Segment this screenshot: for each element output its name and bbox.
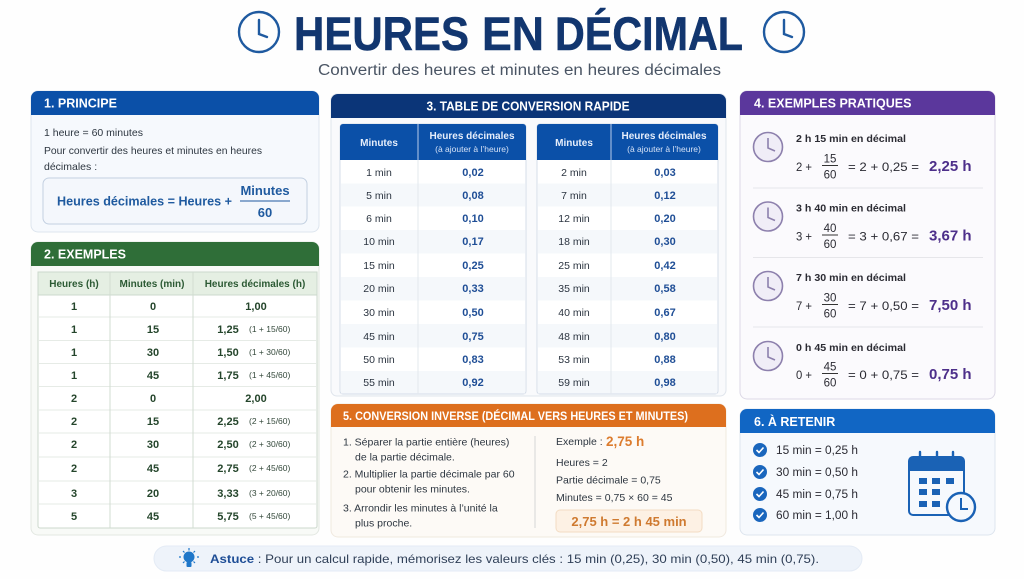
table: exemples: (2 + 45/60) <box>249 463 291 473</box>
table: right conversion: 0,20 <box>654 213 676 225</box>
table: right conversion: 0,67 <box>654 307 676 319</box>
table: exemples: 2,00 <box>245 393 267 405</box>
text block: Pour convertir des heures et minutes en heures <box>44 145 262 157</box>
table: exemples: Heures décimales (h) <box>205 279 305 290</box>
panel: 6. à retenir <box>740 409 995 535</box>
table: exemples: (2 + 30/60) <box>249 439 291 449</box>
table: right conversion: 7 min <box>561 190 587 202</box>
example: 7 h 30: 30 <box>824 292 836 304</box>
steps list: de la partie décimale. <box>355 452 455 464</box>
callout: result <box>556 510 702 532</box>
table: left conversion: 0,92 <box>462 377 484 389</box>
table: right conversion: Minutes <box>555 138 593 149</box>
table: right conversion: 2 min <box>561 167 587 179</box>
example: 2 h 15: 15 <box>824 154 836 166</box>
title: EN <box>482 7 544 60</box>
table: exemples: 2,25 <box>217 416 239 428</box>
worked example: 2,75 h <box>606 434 644 449</box>
table: right conversion: 25 min <box>558 260 590 272</box>
table: right conversion: 0,12 <box>654 190 676 202</box>
worked example: Partie décimale = 0,75 <box>556 474 661 486</box>
panel: 4. exemples pratiques <box>740 91 995 399</box>
worked example <box>556 434 702 532</box>
table: right conversion: 0,80 <box>654 331 676 343</box>
table: exemples: 2,50 <box>217 439 239 451</box>
example: 0 h 45: 45 <box>824 362 836 374</box>
table: exemples: 15 <box>147 416 159 428</box>
table: exemples: 45 <box>147 370 159 382</box>
heading: 1. PRINCIPE <box>44 96 117 110</box>
table: left conversion: 10 min <box>363 236 395 248</box>
example: 0 h 45 <box>754 342 972 390</box>
table: right conversion: 35 min <box>558 283 590 295</box>
example: 2 h 15: 2 + <box>796 160 812 174</box>
table: right conversion: 0,30 <box>654 236 676 248</box>
heading: 3. TABLE DE CONVERSION RAPIDE <box>426 100 630 114</box>
example: 3 h 40 <box>754 202 972 251</box>
table: left conversion: 1 min <box>366 167 392 179</box>
table: left conversion: 0,02 <box>462 167 484 179</box>
table: exemples: 30 <box>147 347 159 359</box>
table: left conversion: 0,33 <box>462 283 484 295</box>
example: 0 h 45: 60 <box>824 378 836 390</box>
formula box: Minutes <box>240 183 290 198</box>
example: 7 h 30: 7 + <box>796 299 812 313</box>
table: exemples: (1 + 30/60) <box>249 347 291 357</box>
checklist: 30 min = 0,50 h <box>776 467 858 479</box>
table: right conversion: Heures décimales <box>621 131 707 142</box>
tip bar <box>154 546 862 571</box>
table: left conversion: Minutes <box>360 138 398 149</box>
heading: 4. EXEMPLES PRATIQUES <box>754 96 911 110</box>
table: left conversion: 0,10 <box>462 213 484 225</box>
example: 3 h 40: 3 + <box>796 230 812 244</box>
subtitle: Convertir des heures et minutes en heures décimales <box>318 62 721 79</box>
table: left conversion <box>340 124 526 394</box>
example: 3 h 40: 60 <box>824 239 836 251</box>
checklist: 15 min = 0,25 h <box>776 445 858 457</box>
panel: 5. conversion inverse <box>331 404 726 537</box>
table: left conversion: 15 min <box>363 260 395 272</box>
formula box <box>43 178 307 224</box>
example: 3 h 40: = 3 + 0,67 = <box>848 230 919 244</box>
table: exemples: 3,33 <box>217 488 239 500</box>
table: exemples: 2 <box>71 439 77 451</box>
table: exemples: 1,00 <box>245 301 267 313</box>
table: exemples: 0 <box>150 393 156 405</box>
table: exemples: 2 <box>71 393 77 405</box>
worked example: Minutes = 0,75 × 60 = 45 <box>556 492 673 504</box>
tip text: Astuce : Pour un calcul rapide, mémorisez les valeurs clés : 15 min (0,25), 30 min (0,50), 45 min (0,75). <box>210 552 819 566</box>
table: exemples: 1,50 <box>217 347 239 359</box>
table: right conversion: 40 min <box>558 307 590 319</box>
table: exemples: (2 + 15/60) <box>249 416 291 426</box>
steps list: plus proche. <box>355 518 412 530</box>
table: left conversion: 20 min <box>363 283 395 295</box>
table: exemples: Heures (h) <box>49 279 99 290</box>
example: 0 h 45: = 0 + 0,75 = <box>848 368 919 382</box>
table: right conversion <box>537 124 718 394</box>
text block: 1 heure = 60 minutes <box>44 127 143 139</box>
steps list: 2. Multiplier la partie décimale par 60 <box>343 468 515 480</box>
table: exemples: 1 <box>71 301 77 313</box>
table: exemples: 30 <box>147 439 159 451</box>
table: exemples: 20 <box>147 488 159 500</box>
table: right conversion: 0,88 <box>654 354 676 366</box>
title: HEURES <box>294 7 469 60</box>
table: right conversion: 53 min <box>558 354 590 366</box>
table: exemples: 45 <box>147 511 159 523</box>
steps list: pour obtenir les minutes. <box>355 484 470 496</box>
steps list: 3. Arrondir les minutes à l’unité la <box>343 502 498 514</box>
title: DÉCIMAL <box>555 7 743 60</box>
example: 2 h 15: 60 <box>824 170 836 182</box>
table: left conversion: 0,75 <box>462 331 484 343</box>
checklist: 45 min = 0,75 h <box>776 489 858 501</box>
table: left conversion: 0,50 <box>462 307 484 319</box>
table: exemples: 2 <box>71 463 77 475</box>
table: exemples: 3 <box>71 488 77 500</box>
table: exemples: 5 <box>71 511 77 523</box>
example: 3 h 40: 3 h 40 min en décimal <box>796 202 906 214</box>
table: left conversion: 30 min <box>363 307 395 319</box>
heading: 6. À RETENIR <box>754 414 835 429</box>
icon: left clock <box>239 12 279 52</box>
title <box>294 7 743 60</box>
table: exemples <box>38 272 317 528</box>
table: right conversion: 12 min <box>558 213 590 225</box>
example: 3 h 40: 3,67 h <box>929 228 972 244</box>
callout: result: 2,75 h = 2 h 45 min <box>571 514 687 529</box>
worked example: Heures = 2 <box>556 457 608 469</box>
example: 2 h 15 <box>754 132 972 182</box>
table: right conversion: (à ajouter à l’heure) <box>627 144 701 154</box>
table: exemples: 2 <box>71 416 77 428</box>
example: 3 h 40: 40 <box>824 223 836 235</box>
panel: 2. exemples <box>31 242 319 535</box>
text block: décimales : <box>44 161 97 173</box>
table: exemples: 45 <box>147 463 159 475</box>
example: 7 h 30 <box>754 272 972 320</box>
heading: 5. CONVERSION INVERSE (DÉCIMAL VERS HEURES ET MINUTES) <box>343 408 688 423</box>
text block <box>44 127 262 173</box>
example: 7 h 30: 7 h 30 min en décimal <box>796 272 906 284</box>
worked example: Exemple : <box>556 436 603 448</box>
table: exemples: 15 <box>147 324 159 336</box>
table: right conversion: 0,98 <box>654 377 676 389</box>
table: left conversion: 0,17 <box>462 236 484 248</box>
table: exemples: 0 <box>150 301 156 313</box>
table: right conversion: 48 min <box>558 331 590 343</box>
table: left conversion: 45 min <box>363 331 395 343</box>
icon: light bulb <box>179 548 199 567</box>
table: exemples: 1 <box>71 324 77 336</box>
example: 2 h 15: 2 h 15 min en décimal <box>796 133 906 145</box>
example: 7 h 30: = 7 + 0,50 = <box>848 299 919 313</box>
table: exemples: 1 <box>71 347 77 359</box>
table: exemples: (5 + 45/60) <box>249 511 291 521</box>
example: 0 h 45: 0 + <box>796 368 812 382</box>
example: 0 h 45: 0,75 h <box>929 366 972 383</box>
example: 7 h 30: 7,50 h <box>929 297 972 314</box>
table: left conversion: 50 min <box>363 354 395 366</box>
table: right conversion: 18 min <box>558 236 590 248</box>
table: left conversion: 0,83 <box>462 354 484 366</box>
steps list: 1. Séparer la partie entière (heures) <box>343 436 509 448</box>
header: title and subtitle <box>239 7 804 79</box>
table: right conversion: 0,58 <box>654 283 676 295</box>
example: 2 h 15: 2,25 h <box>929 158 972 175</box>
table: right conversion: 59 min <box>558 377 590 389</box>
panel: 1. principe <box>31 91 319 232</box>
table: left conversion: 0,08 <box>462 190 484 202</box>
heading: 2. EXEMPLES <box>44 248 126 262</box>
steps list <box>343 436 515 530</box>
icon: calendar with clock <box>909 452 975 521</box>
table: right conversion: 0,03 <box>654 167 676 179</box>
checklist: 60 min = 1,00 h <box>776 510 858 522</box>
table: left conversion: 6 min <box>366 213 392 225</box>
formula box: 60 <box>258 205 272 220</box>
table: exemples: (1 + 15/60) <box>249 324 291 334</box>
formula box: Heures décimales = Heures + <box>57 194 232 208</box>
table: exemples: 2,75 <box>217 463 239 475</box>
table: exemples: (3 + 20/60) <box>249 488 291 498</box>
table: right conversion: 0,42 <box>654 260 676 272</box>
table: left conversion: 0,25 <box>462 260 484 272</box>
example: 2 h 15: = 2 + 0,25 = <box>848 160 919 174</box>
icon: right clock <box>764 12 804 52</box>
table: exemples: 1 <box>71 370 77 382</box>
table: exemples: 5,75 <box>217 511 239 523</box>
table: left conversion: Heures décimales <box>429 131 515 142</box>
table: left conversion: (à ajouter à l’heure) <box>435 144 509 154</box>
panel: 3. table de conversion rapide <box>331 94 726 396</box>
table: exemples: (1 + 45/60) <box>249 370 291 380</box>
checklist <box>753 443 858 522</box>
example: 7 h 30: 60 <box>824 308 836 320</box>
table: left conversion: 5 min <box>366 190 392 202</box>
table: left conversion: 55 min <box>363 377 395 389</box>
table: exemples: Minutes (min) <box>120 279 184 290</box>
table: exemples: 1,25 <box>217 324 239 336</box>
example: 0 h 45: 0 h 45 min en décimal <box>796 342 906 354</box>
table: exemples: 1,75 <box>217 370 239 382</box>
